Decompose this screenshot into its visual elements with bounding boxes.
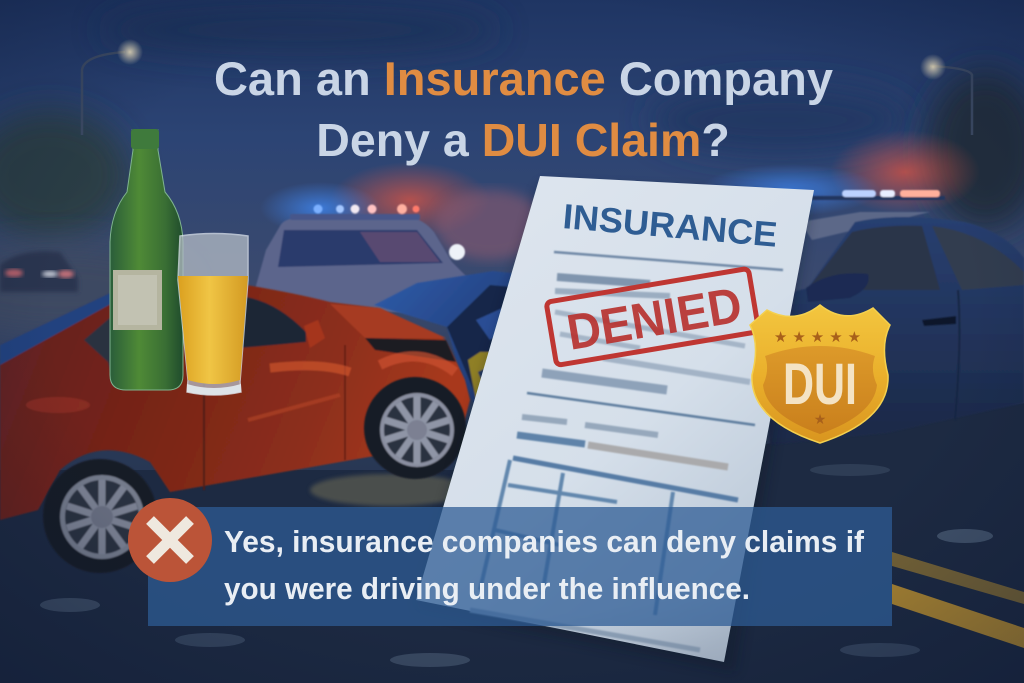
document text lines: [470, 252, 783, 650]
document shadow: [415, 185, 812, 672]
insurance document: [416, 176, 814, 662]
answer text: [224, 524, 865, 606]
answer banner: [148, 507, 892, 626]
document heading: INSURANCE: [561, 197, 779, 255]
badge label: DUI: [783, 352, 857, 417]
title line 1: Can an Insurance Company: [214, 52, 833, 105]
blue car: right side: [760, 190, 1024, 445]
wheel: front red car: [364, 377, 466, 479]
wheel: rear red car: [43, 459, 157, 573]
road markings and puddles: [40, 464, 1024, 667]
icon: glass of beer: [178, 234, 248, 395]
police car: background: [252, 204, 472, 312]
crushed blue hood: [374, 271, 530, 435]
badge stars: ★★★★★: [774, 329, 866, 346]
title line 2: Deny a DUI Claim?: [316, 114, 730, 166]
red car: crashed sedan: [0, 284, 470, 520]
icon: red x: [128, 498, 212, 582]
stamp: denied: DENIED: [563, 277, 746, 361]
answer text: Yes, insurance companies can deny claims if: [224, 524, 865, 559]
badge: DUI: [750, 305, 890, 443]
title: [214, 52, 833, 166]
badge lower star: ★: [814, 411, 826, 427]
answer text: you were driving under the influence.: [224, 571, 750, 606]
icon: green beer bottle: [110, 129, 183, 390]
